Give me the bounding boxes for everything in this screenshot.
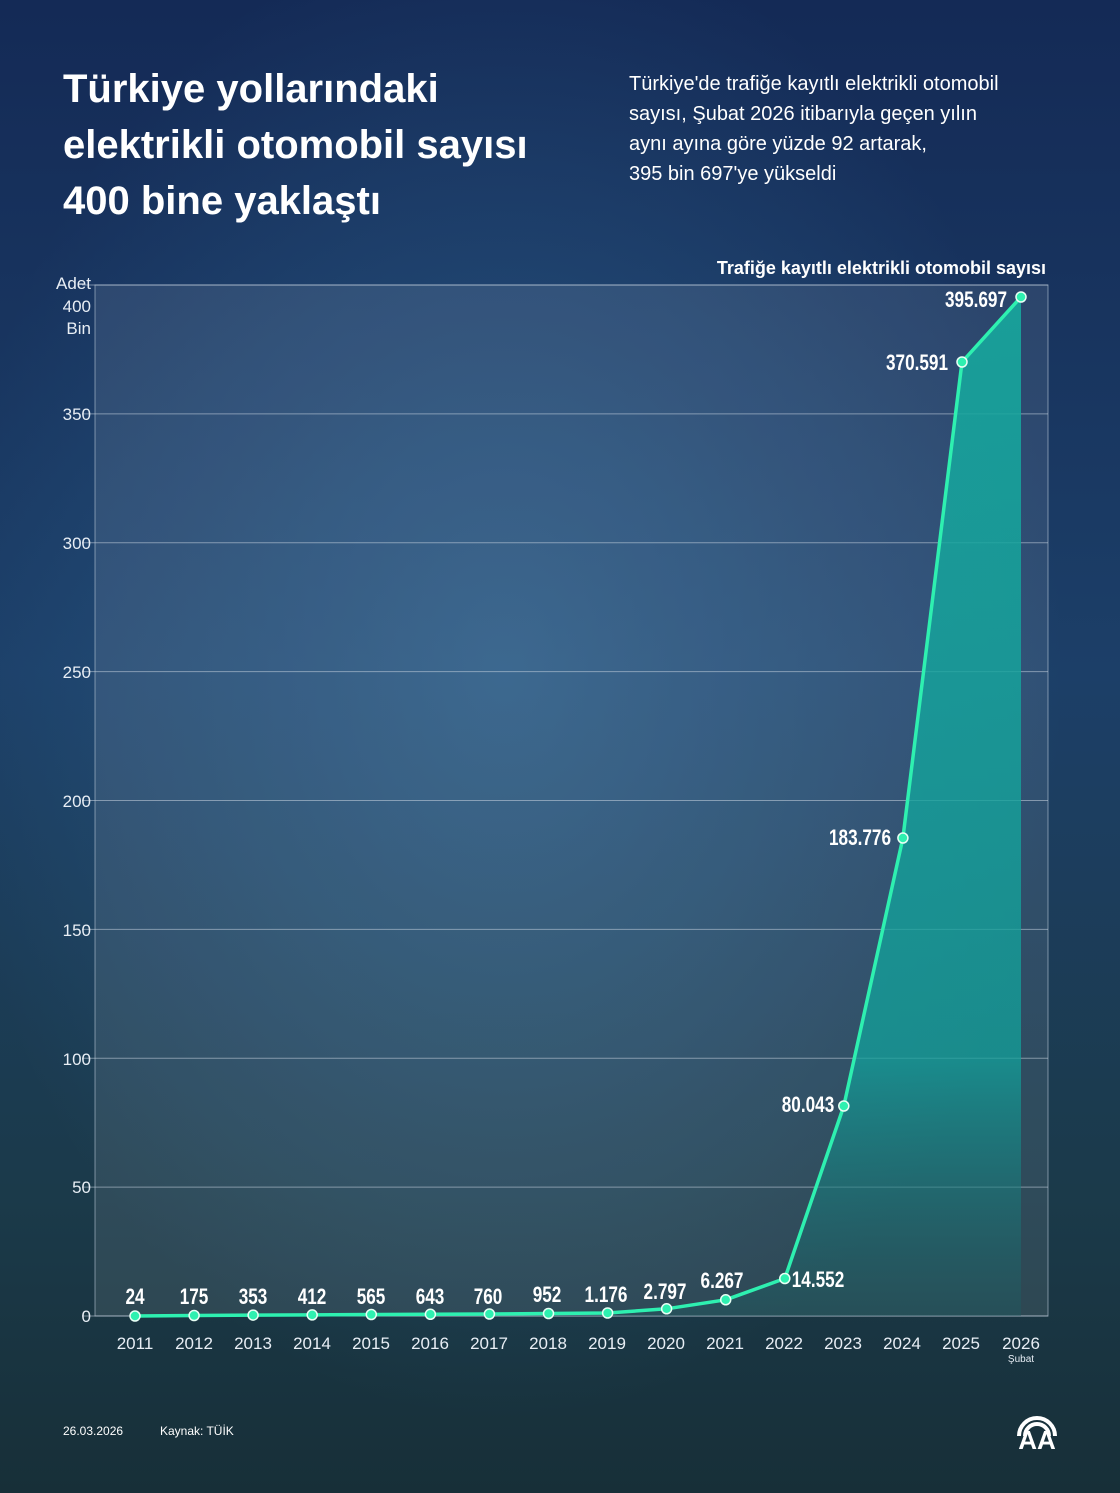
data points [130, 292, 1026, 1321]
line chart [56, 274, 1048, 1365]
value labels: 1.176 [585, 1283, 627, 1308]
x axis labels: 2012 [175, 1334, 213, 1353]
footer: Kaynak: TÜİK [160, 1424, 234, 1438]
x axis labels: Şubat [1008, 1354, 1034, 1365]
y axis labels: 250 [63, 663, 91, 682]
subtitle text: sayısı, Şubat 2026 itibarıyla geçen yılın [629, 103, 977, 125]
x axis labels: 2026 [1002, 1334, 1040, 1353]
x axis labels: 2016 [411, 1334, 449, 1353]
value labels: 80.043 [782, 1093, 834, 1118]
footer: 26.03.2026 [63, 1424, 123, 1438]
x axis labels: 2022 [765, 1334, 803, 1353]
x axis labels: 2017 [470, 1334, 508, 1353]
x axis labels: 2025 [942, 1334, 980, 1353]
y axis labels: Adet [56, 274, 91, 293]
title [63, 67, 528, 223]
title: 400 bine yaklaştı [63, 179, 381, 223]
subtitle text [629, 73, 999, 185]
value labels: 760 [474, 1285, 502, 1310]
x axis labels: 2019 [588, 1334, 626, 1353]
x axis labels: 2013 [234, 1334, 272, 1353]
value labels: 643 [416, 1285, 444, 1310]
title: Türkiye yollarındaki [63, 67, 439, 111]
y axis labels: 300 [63, 534, 91, 553]
x axis labels: 2021 [706, 1334, 744, 1353]
area [135, 297, 1021, 1316]
y axis labels: 0 [82, 1307, 91, 1326]
y axis labels: 400 [63, 297, 91, 316]
x axis labels: 2023 [824, 1334, 862, 1353]
subtitle text: 395 bin 697'ye yükseldi [629, 163, 836, 185]
subtitle text: Türkiye'de trafiğe kayıtlı elektrikli otomobil [629, 73, 999, 95]
y axis labels: Bin [66, 319, 91, 338]
line [135, 297, 1021, 1316]
value labels: 2.797 [644, 1280, 686, 1305]
x axis labels: 2011 [117, 1334, 153, 1353]
value labels: 24 [125, 1285, 145, 1310]
value labels: 565 [357, 1285, 385, 1310]
y axis labels: 350 [63, 405, 91, 424]
x axis labels: 2018 [529, 1334, 567, 1353]
y axis labels [56, 274, 91, 1326]
value labels: 395.697 [945, 288, 1007, 313]
y axis labels: 200 [63, 792, 91, 811]
y axis labels: 150 [63, 921, 91, 940]
value labels: 175 [180, 1285, 208, 1310]
value labels: 183.776 [829, 826, 891, 851]
value labels: 370.591 [886, 351, 948, 376]
value labels: 412 [298, 1285, 326, 1310]
x axis labels [117, 1334, 1040, 1365]
y axis labels: 50 [72, 1178, 91, 1197]
x axis labels: 2020 [647, 1334, 685, 1353]
x axis labels: 2014 [293, 1334, 331, 1353]
value labels: 14.552 [792, 1268, 844, 1293]
subtitle text: aynı ayına göre yüzde 92 artarak, [629, 133, 927, 155]
value labels [125, 288, 1007, 1310]
value labels: 952 [533, 1283, 561, 1308]
x axis labels: 2015 [352, 1334, 390, 1353]
footer [63, 1424, 234, 1438]
chart title: Trafiğe kayıtlı elektrikli otomobil sayısı [717, 258, 1046, 278]
title: elektrikli otomobil sayısı [63, 123, 528, 167]
y axis labels: 100 [63, 1050, 91, 1069]
x axis labels: 2024 [883, 1334, 921, 1353]
icon: AA logo: AA [1018, 1425, 1056, 1455]
value labels: 6.267 [701, 1269, 743, 1294]
value labels: 353 [239, 1285, 267, 1310]
